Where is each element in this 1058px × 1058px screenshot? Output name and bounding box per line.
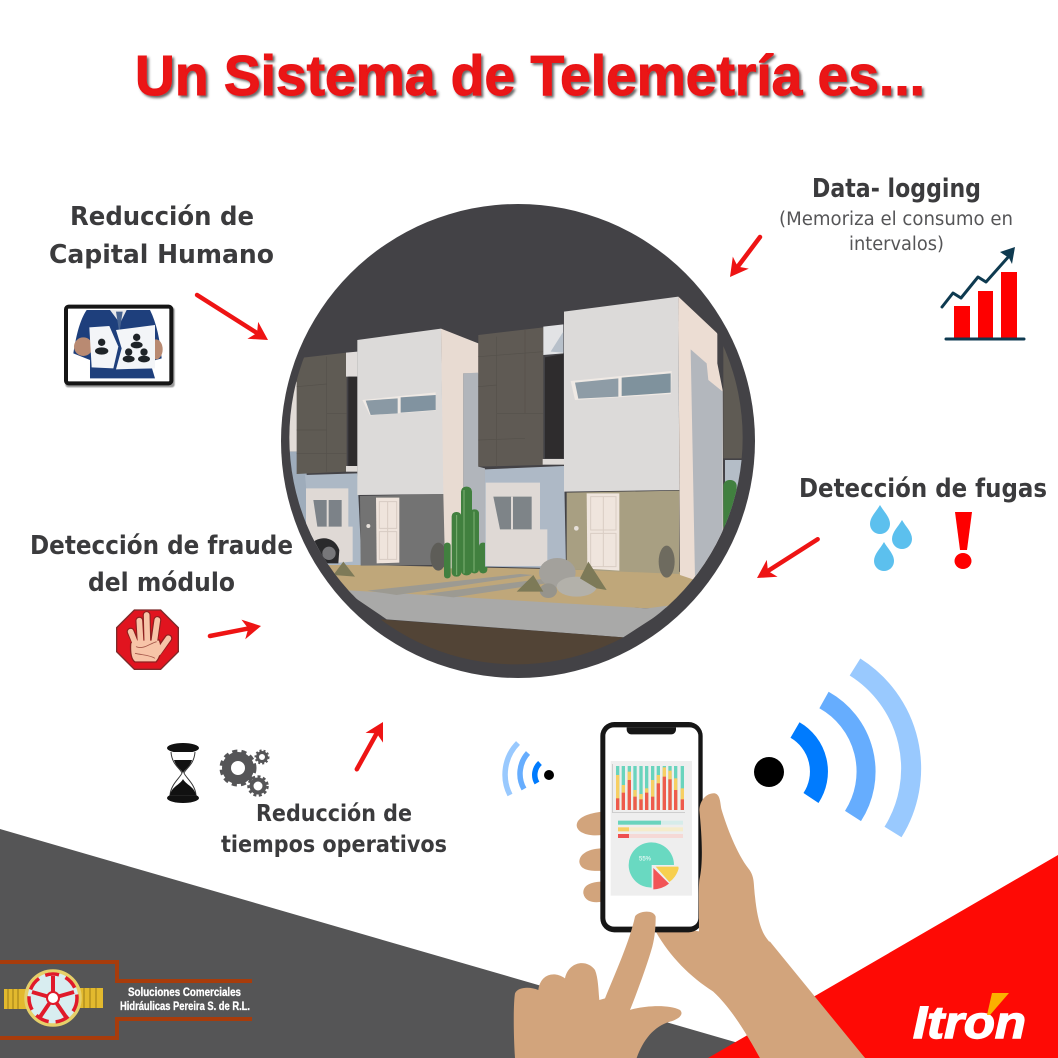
icon: large wifi signal (754, 667, 911, 832)
cactus cluster (444, 487, 487, 578)
ground (328, 564, 698, 608)
icon: stop hand (117, 610, 178, 669)
left house (357, 329, 485, 571)
phone (600, 722, 703, 932)
label: Reducción de tiempos operativos: tiempos operativos (221, 832, 447, 858)
label: Reducción de tiempos operativos: Reducción de (256, 801, 412, 827)
logo: Soluciones Comerciales Hidráulicas Pereira: Hidráulicas Pereira S. de R.L. (120, 1001, 250, 1013)
arrow: fugas to circle (752, 531, 823, 586)
logo: Soluciones Comerciales Hidráulicas Pereira (0, 962, 252, 1038)
dashboard panel (611, 761, 692, 896)
icon: exclamation mark (954, 512, 972, 569)
label: Reducción de tiempos operativos (221, 801, 447, 858)
boulders and grass (333, 558, 607, 598)
background: red corner (708, 855, 1058, 1058)
pointing hand (514, 912, 682, 1058)
icon: water drops (870, 505, 912, 571)
label: Data-logging (779, 174, 1013, 255)
holding hand (699, 793, 865, 1058)
icon: hourglass (167, 743, 199, 803)
arrow: capital humano to circle (192, 287, 273, 348)
circular house picture (281, 204, 755, 680)
icon: small wifi signal (505, 743, 554, 795)
neighbouring house, right (723, 347, 743, 528)
pie chart: 55% (639, 857, 652, 863)
arrow: tiempos to circle (348, 717, 392, 774)
icon: tablet with business man (65, 307, 175, 387)
logo: Soluciones Comerciales Hidráulicas Pereira: Soluciones Comerciales (128, 987, 241, 999)
label: Data-logging: Data- logging (812, 174, 981, 204)
icon: rising bar chart (942, 247, 1024, 339)
title: Un Sistema de Telemetría es... (135, 44, 925, 108)
holding hand fingers (577, 812, 603, 902)
phone and hands illustration (514, 722, 865, 1058)
label: Data-logging: intervalos) (849, 234, 944, 255)
label: Reducción de Capital Humano (49, 202, 274, 270)
label: Reducción de Capital Humano: Capital Humano (49, 240, 274, 270)
logo: Itron: Itron (913, 997, 1026, 1048)
neighbouring house, left (287, 352, 362, 565)
arrow: data logging to circle (722, 231, 768, 283)
background: dark corner band (0, 829, 790, 1058)
label: Reducción de Capital Humano: Reducción de (70, 202, 254, 232)
right house (478, 297, 723, 580)
water meter emblem (4, 971, 103, 1025)
arrow: fraude to circle (208, 616, 263, 646)
holding hand palm, behind phone (656, 930, 865, 1058)
label: Detección de fraude del módulo (30, 531, 293, 598)
stacked bar chart (613, 764, 685, 813)
label: Detección de fraude del módulo: del módulo (88, 568, 235, 598)
label: Data-logging: (Memoriza el consumo en (779, 209, 1013, 230)
house illustration (287, 297, 747, 680)
label: Detección de fraude del módulo: Detección de fraude (30, 531, 293, 561)
icon: gears (222, 750, 268, 796)
progress bars (618, 821, 683, 838)
